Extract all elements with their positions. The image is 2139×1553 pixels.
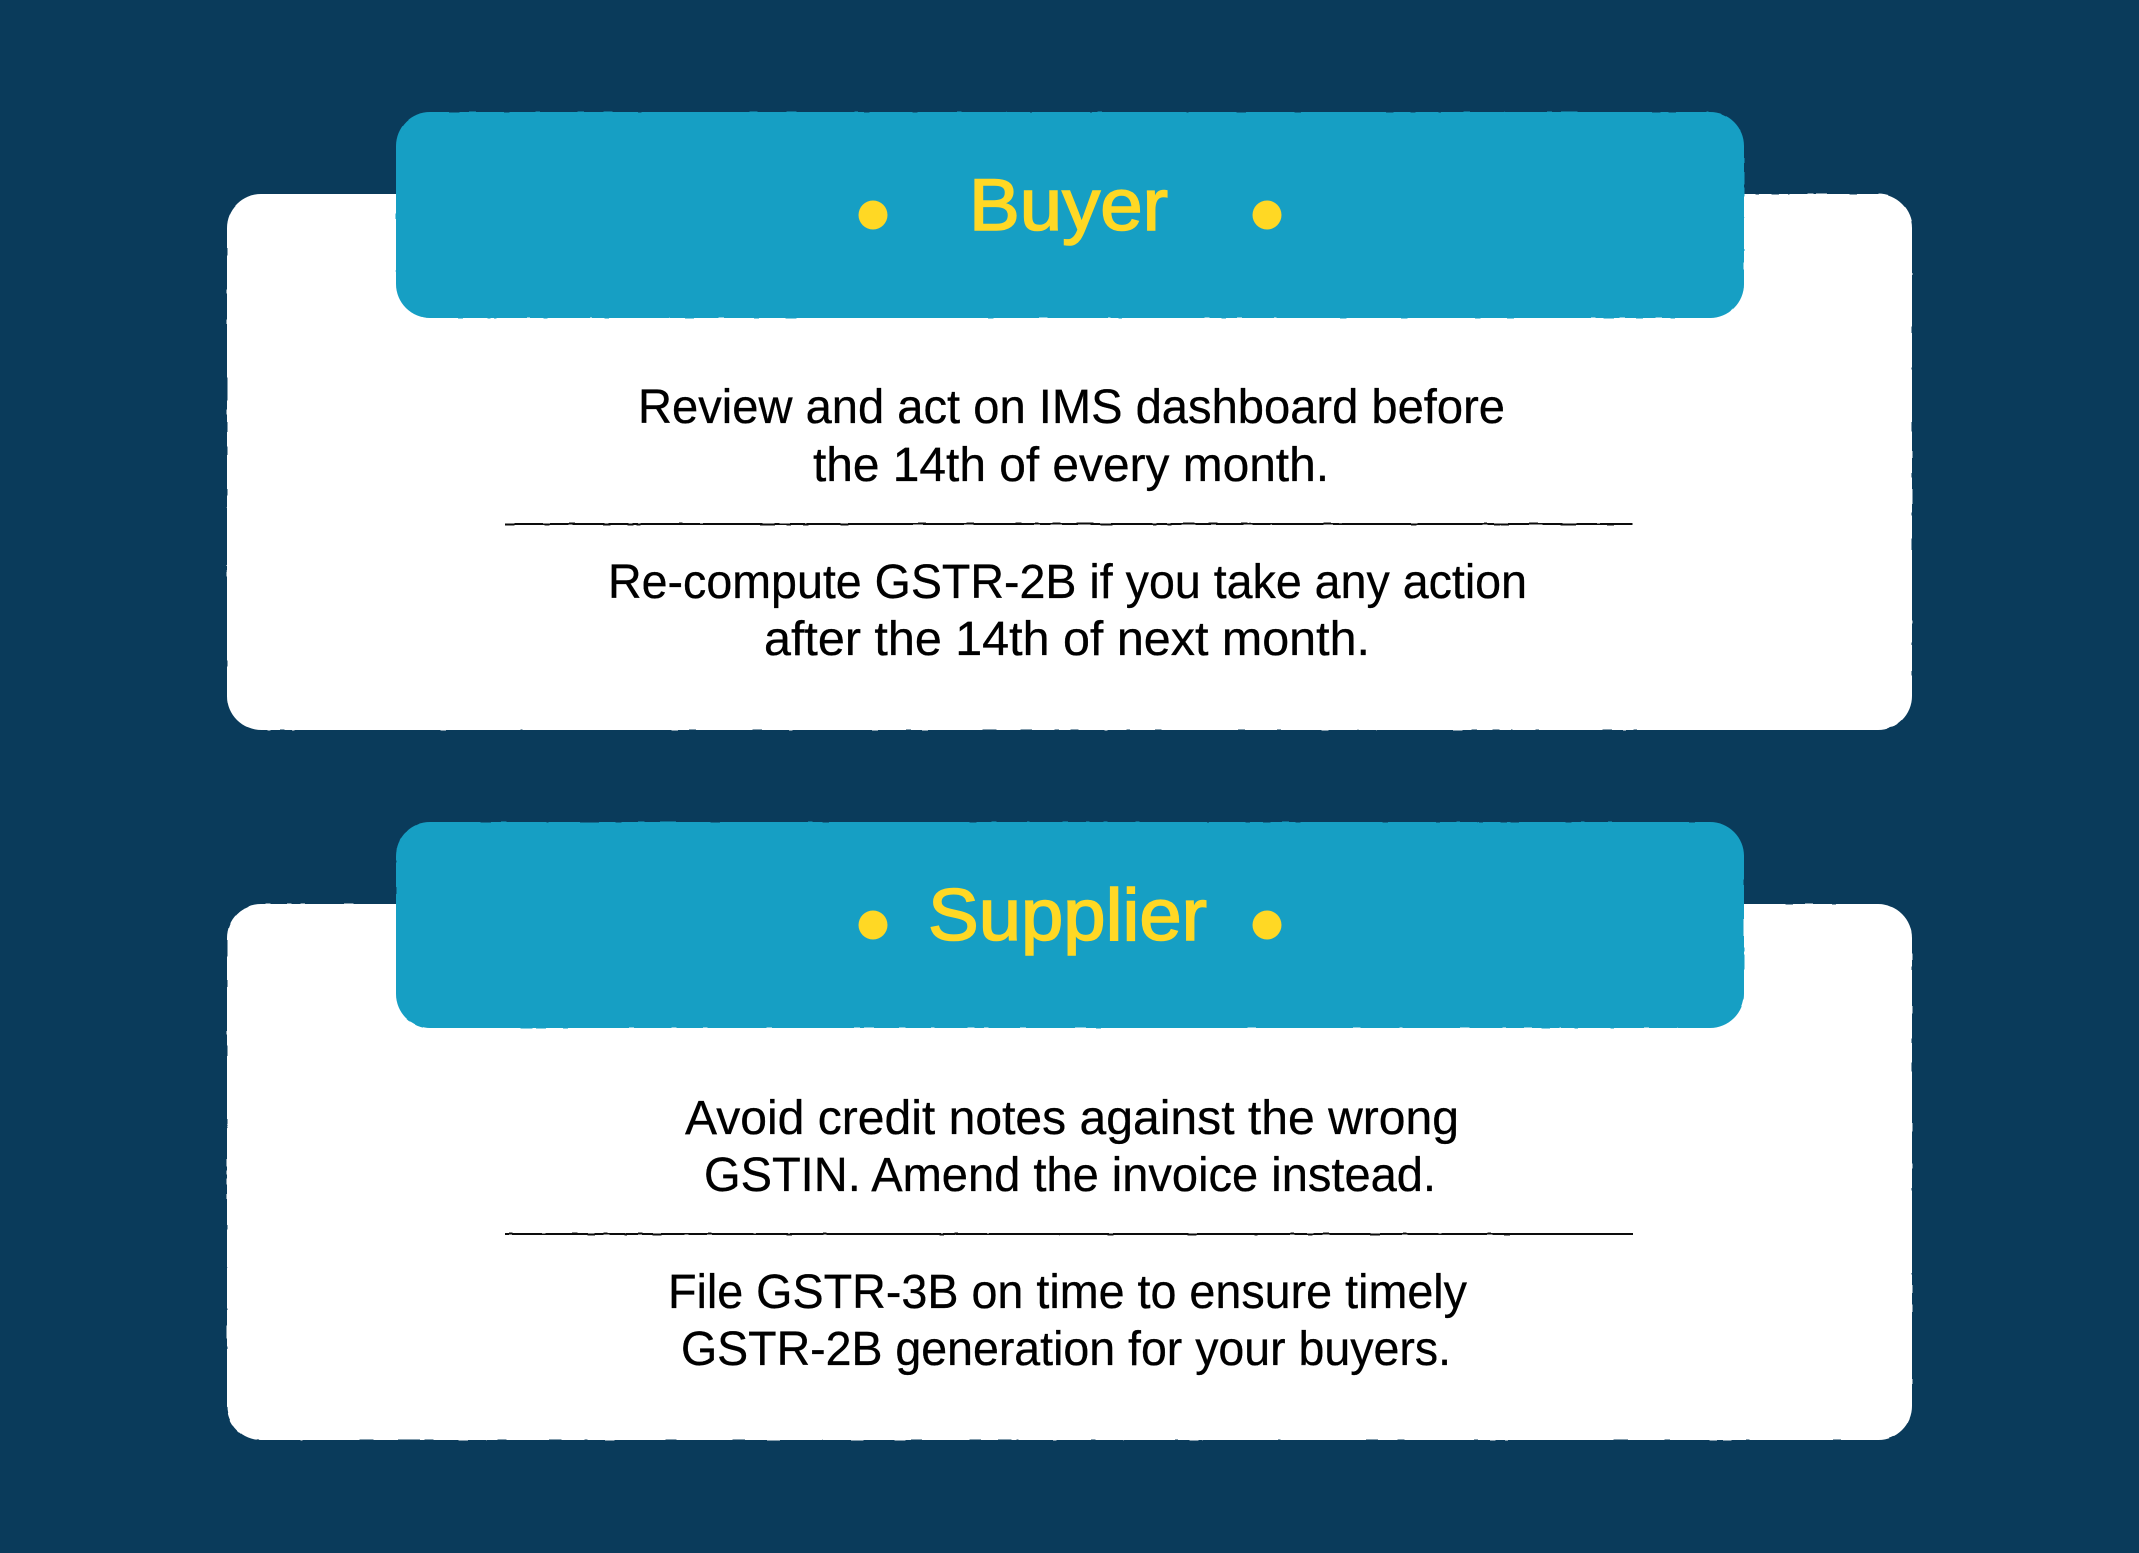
buyer tip one: the 14th of every month. <box>813 439 1329 492</box>
buyer card <box>227 194 1912 730</box>
buyer tip one <box>638 381 1505 492</box>
supplier card <box>227 904 1912 1440</box>
buyer tip two: after the 14th of next month. <box>764 613 1370 666</box>
buyer heading: Buyer <box>969 165 1168 246</box>
supplier tip two: GSTR-2B generation for your buyers. <box>681 1323 1451 1376</box>
buyer tip two: Re-compute GSTR-2B if you take any action <box>608 556 1527 609</box>
supplier tip two <box>668 1266 1467 1376</box>
panel: supplier <box>227 822 1912 1440</box>
supplier header band <box>396 822 1744 1028</box>
supplier tip two: File GSTR-3B on time to ensure timely <box>668 1266 1467 1319</box>
supplier heading: Supplier <box>928 875 1207 956</box>
buyer right dot <box>1252 200 1282 230</box>
panel: buyer <box>227 112 1912 730</box>
buyer tip one: Review and act on IMS dashboard before <box>638 381 1505 434</box>
supplier tip one: GSTIN. Amend the invoice instead. <box>704 1149 1436 1202</box>
supplier tip one: Avoid credit notes against the wrong <box>685 1092 1459 1145</box>
buyer tip two <box>608 556 1527 666</box>
supplier tip one <box>685 1092 1459 1202</box>
buyer left dot <box>858 200 888 230</box>
supplier right dot <box>1252 910 1282 940</box>
supplier left dot <box>858 910 888 940</box>
buyer header band <box>396 112 1744 318</box>
